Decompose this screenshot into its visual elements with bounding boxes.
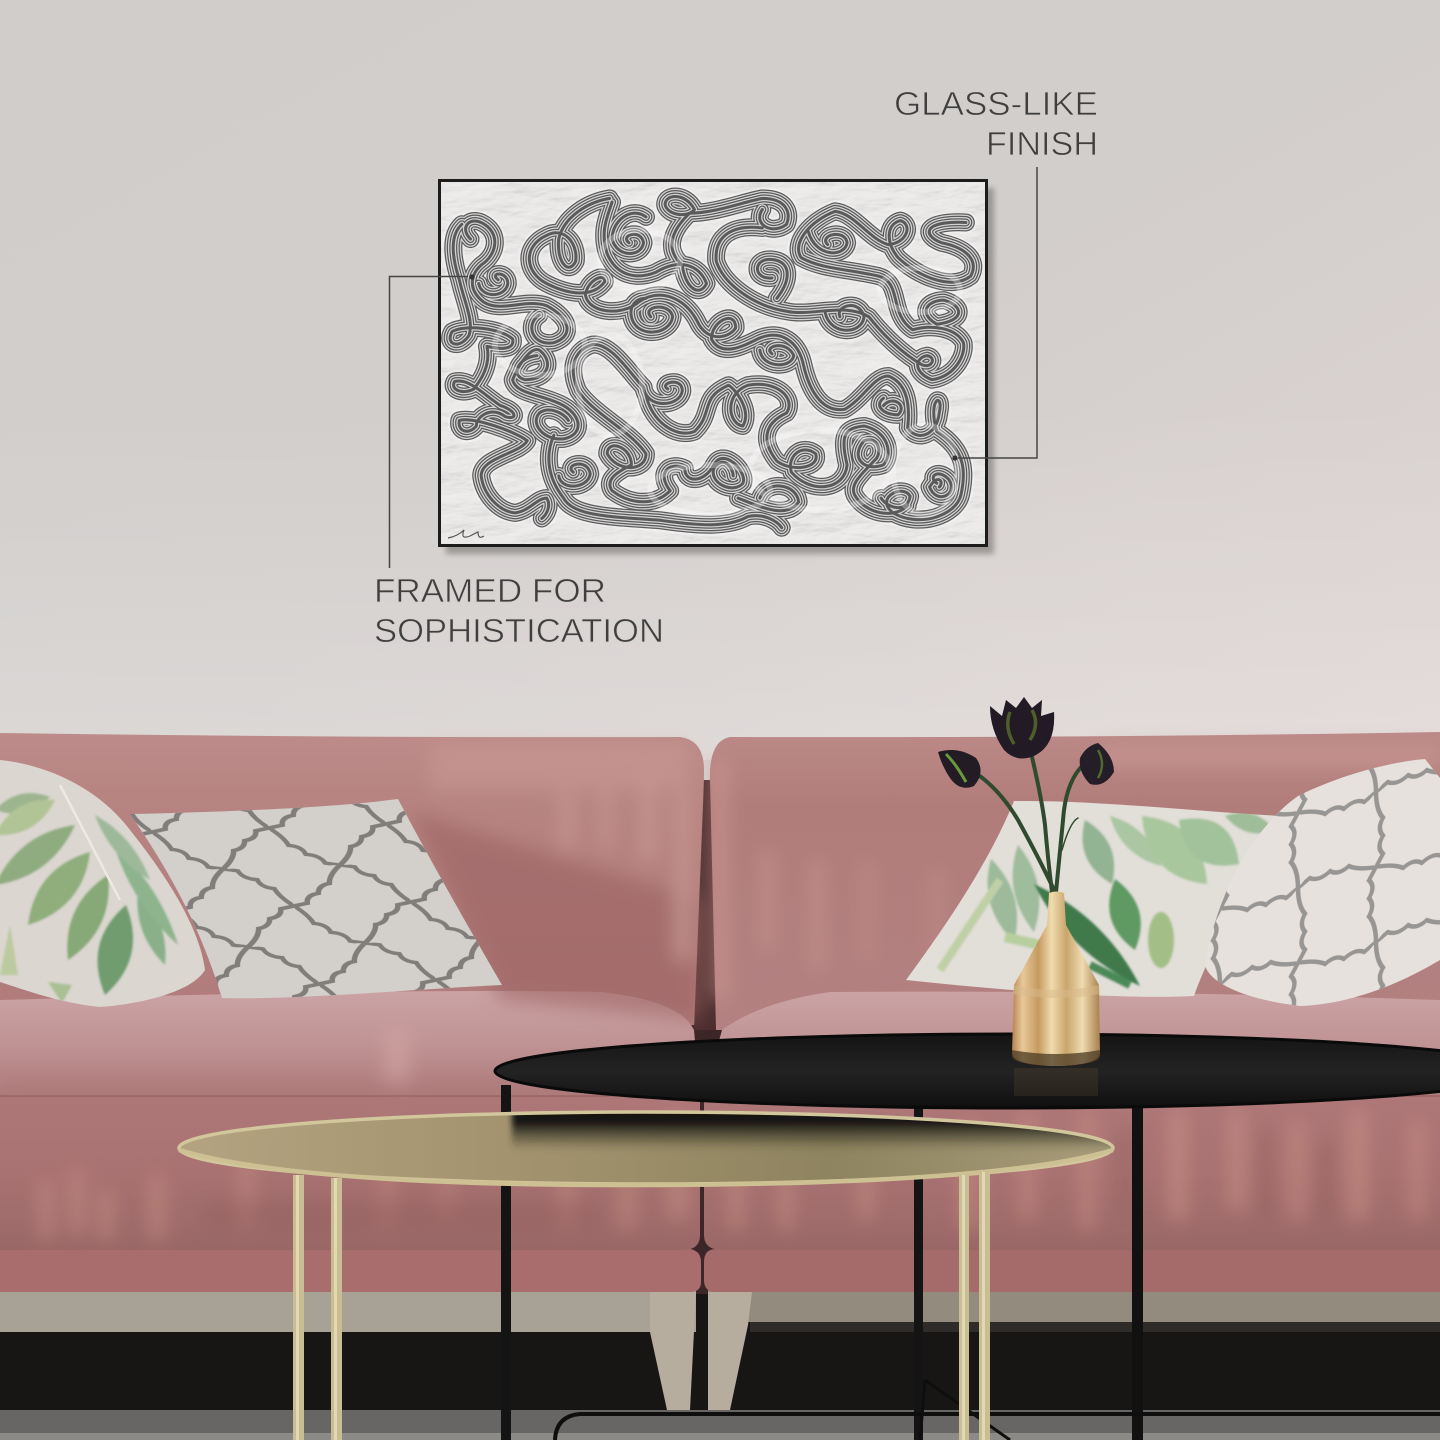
base band: [0, 1249, 701, 1292]
lower skirt highlights: [40, 1180, 52, 1240]
top left highlight: [430, 745, 690, 790]
gold rim: [179, 1112, 1113, 1184]
callout: glass-like finish: [894, 85, 1098, 461]
sofa: [0, 732, 1440, 1410]
pillow: palm leaf left: [0, 760, 205, 1007]
callout: framed for sophistication: SOPHISTICATION: [374, 612, 664, 649]
callout: glass-like finish: FINISH: [986, 125, 1098, 162]
signature: [448, 530, 484, 538]
pillow: moroccan trellis right: [1200, 755, 1440, 1010]
leaf fingers: [0, 825, 75, 885]
pale leaves: [988, 859, 1017, 942]
plaster canvas: [441, 182, 985, 544]
frame shadow: [446, 188, 994, 554]
seat cushion left: [0, 991, 700, 1096]
serpentine line painting: [450, 197, 973, 528]
pillow shadow on back: [410, 812, 700, 1020]
black coffee table: [495, 1034, 1440, 1440]
brass vase: [1012, 892, 1100, 1066]
pillow: moroccan trellis left: [130, 799, 502, 998]
floor and under-sofa shadow: [0, 1290, 1440, 1440]
black table legs: [501, 1085, 511, 1440]
sofa dark backing: [0, 780, 1440, 1294]
sofa back left cushion: [0, 733, 704, 1030]
large bud: [990, 697, 1054, 759]
stems: [977, 757, 1083, 892]
dark leaves: [1034, 884, 1140, 986]
callout: glass-like finish: GLASS-LIKE: [894, 85, 1098, 122]
ghost white rings: [495, 230, 960, 515]
gap between cushions: [694, 780, 716, 1030]
black frame: [438, 179, 988, 547]
gold coffee table: [179, 1100, 1152, 1440]
seat cushion right: [704, 992, 1440, 1096]
left bud: [938, 750, 981, 788]
vase reflection: [1014, 1068, 1098, 1096]
callout: framed for sophistication: FRAMED FOR: [374, 572, 606, 609]
callout: framed for sophistication: [374, 274, 664, 649]
front skirt right: [704, 1095, 1440, 1250]
framed artwork: [438, 179, 994, 554]
dark reflection on gold surface: [508, 1114, 1111, 1150]
lower ring: [555, 1414, 1440, 1440]
right bud: [1080, 743, 1114, 785]
wood base rail left: [0, 1290, 696, 1332]
flower buds: [938, 697, 1114, 788]
gold legs: [293, 1175, 304, 1440]
pillow: palm leaf right: [906, 801, 1282, 997]
wood base rail right: [708, 1290, 1440, 1322]
fabric streaks and shading: [0, 745, 1440, 1240]
gold tabletop: [179, 1112, 1113, 1184]
sofa back right cushion: [708, 732, 1440, 1030]
seat seam: [0, 1095, 1440, 1097]
wall background: [0, 0, 1440, 800]
leaf midrib: [60, 785, 120, 900]
wooden legs: [650, 1292, 696, 1410]
seat highlight: [385, 1030, 409, 1085]
front skirt left: [0, 1095, 700, 1250]
tabletop: [495, 1034, 1440, 1108]
